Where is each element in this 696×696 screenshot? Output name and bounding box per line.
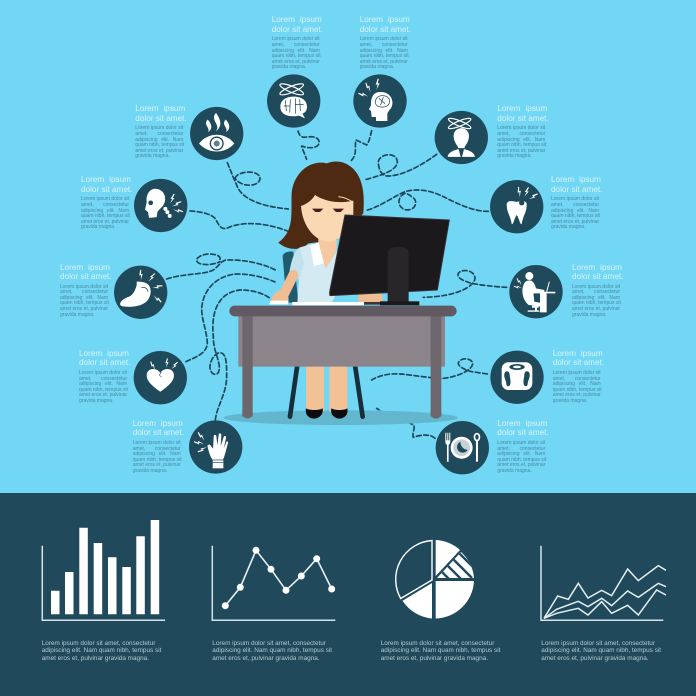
body text	[497, 125, 546, 159]
caption: multi line chart: amet eros et, pulvinar gravida magna.	[541, 655, 649, 662]
multi line chart	[541, 546, 666, 620]
icon: dizzy person	[435, 111, 488, 164]
heading	[360, 15, 411, 34]
heading: dolor sit amet.	[497, 428, 549, 437]
body text: gravida magna.	[272, 64, 306, 70]
body text: amet, consectetur	[551, 202, 599, 208]
heading: Lorem ipsum	[553, 349, 603, 358]
icon: burning eye	[190, 107, 243, 160]
icon: heart pain	[134, 351, 187, 404]
caption: pie chart: Lorem ipsum dolor sit amet, consectetur	[381, 640, 494, 646]
body text: gravida magna.	[360, 64, 394, 70]
body text: gravida magna.	[551, 224, 585, 230]
body text: amet, consectetur	[81, 202, 129, 208]
heading: Lorem ipsum	[60, 263, 110, 272]
heading	[553, 349, 604, 367]
heading: dolor sit amet.	[551, 185, 602, 194]
body text: adipiscing elit. Nam	[497, 137, 545, 143]
hair	[278, 162, 364, 249]
caption: bar chart: Lorem ipsum dolor sit amet, consectetur	[42, 640, 155, 646]
body text: gravida magna.	[60, 312, 94, 318]
body text: amet eros et, pulvinar	[133, 462, 181, 468]
body text: adipiscing elit. Nam	[79, 381, 127, 387]
body text: amet eros et, pulvinar	[79, 392, 127, 398]
body text: amet, consectetur	[497, 446, 545, 452]
pie chart	[396, 540, 480, 618]
body text	[553, 370, 602, 404]
body text: adipiscing elit. Nam	[81, 208, 129, 214]
text block: tooth	[551, 175, 602, 230]
body text: Lorem ipsum dolor sit	[135, 125, 183, 131]
heading: dolor sit amet.	[553, 358, 604, 367]
heading	[60, 263, 111, 281]
body text: gravida magna.	[79, 398, 113, 404]
face	[301, 195, 353, 242]
text block: brain	[272, 15, 323, 70]
body text: amet, consectetur	[133, 446, 181, 452]
body text: gravida magna.	[81, 224, 115, 230]
caption: pie chart: adipiscing elit. Nam quam nibh, tempus sit	[381, 647, 500, 654]
caption: line chart: adipiscing elit. Nam quam nibh, tempus sit	[212, 647, 332, 654]
body text: Lorem ipsum dolor sit	[551, 196, 599, 202]
body text: gravida magna.	[553, 398, 587, 404]
body text: amet eros et, pulvinar	[497, 148, 545, 154]
text block: scale	[553, 349, 604, 404]
icon: skull and neck pain	[134, 179, 187, 232]
desk	[229, 306, 457, 419]
heading: Lorem ipsum	[81, 175, 131, 184]
body text: quam nibh, tempus sit	[81, 213, 130, 219]
heading	[572, 263, 623, 281]
body text: quam nibh, tempus sit	[360, 53, 409, 59]
legs and shoes	[306, 365, 348, 419]
heading: dolor sit amet.	[135, 114, 187, 123]
caption: multi line chart: adipiscing elit. Nam quam nibh, tempus sit	[541, 647, 661, 654]
body text: quam nibh, tempus sit	[272, 53, 321, 59]
caption: pie chart: amet eros et, pulvinar gravida magna.	[381, 655, 488, 662]
caption: bar chart	[42, 640, 162, 662]
floor shadow	[223, 410, 458, 425]
heading: dolor sit amet.	[79, 358, 130, 367]
heading: Lorem ipsum	[497, 419, 547, 428]
text block: back	[572, 263, 623, 318]
heading: dolor sit amet.	[133, 428, 184, 437]
body text	[79, 370, 128, 404]
body text: adipiscing elit. Nam	[553, 381, 601, 387]
chair	[283, 252, 363, 417]
body text: Lorem ipsum dolor sit	[79, 370, 127, 376]
body text: quam nibh, tempus sit	[497, 142, 546, 148]
heading	[79, 349, 130, 367]
icon: stomach pain	[114, 266, 167, 319]
body text: adipiscing elit. Nam	[133, 451, 181, 457]
heading: dolor sit amet.	[497, 114, 549, 123]
body text: amet, consectetur	[79, 376, 127, 382]
body text: quam nibh, tempus sit	[497, 457, 546, 463]
body text: Lorem ipsum dolor sit	[497, 440, 545, 446]
heading: Lorem ipsum	[551, 175, 601, 184]
heading	[81, 175, 132, 194]
body text	[360, 36, 409, 70]
body text: amet, consectetur	[497, 131, 545, 137]
heading: Lorem ipsum	[360, 15, 410, 24]
body text: gravida magna.	[572, 312, 606, 318]
heading: dolor sit amet.	[60, 272, 111, 281]
body text: amet, consectetur	[272, 42, 320, 48]
caption: bar chart: amet eros et, pulvinar gravida magna.	[42, 655, 149, 662]
caption: bar chart: adipiscing elit. Nam quam nibh, tempus sit	[42, 647, 161, 654]
heading	[272, 15, 323, 34]
body text: adipiscing elit. Nam	[551, 208, 599, 214]
body text: amet, consectetur	[572, 289, 620, 295]
heading: dolor sit amet.	[81, 185, 132, 194]
body text: amet eros et, pulvinar	[497, 462, 545, 468]
text block: stomach	[60, 263, 111, 318]
heading	[497, 419, 549, 437]
heading: dolor sit amet.	[360, 25, 411, 34]
body text: quam nibh, tempus sit	[60, 300, 109, 306]
body text: Lorem ipsum dolor sit	[360, 36, 408, 42]
body text: Lorem ipsum dolor sit	[81, 196, 129, 202]
body text: Lorem ipsum dolor sit	[272, 36, 320, 42]
bottom panel background	[0, 493, 696, 696]
heading	[135, 104, 187, 123]
body text: quam nibh, tempus sit	[551, 213, 600, 219]
heading: Lorem ipsum	[572, 263, 622, 272]
text block: heart	[79, 349, 130, 404]
heading: Lorem ipsum	[79, 349, 129, 358]
keyboard and mouse	[269, 301, 381, 305]
heading	[133, 419, 184, 437]
body text: amet eros et, pulvinar	[272, 59, 320, 65]
heading: Lorem ipsum	[133, 419, 183, 428]
body text: gravida magna.	[497, 153, 532, 159]
body text	[551, 196, 600, 230]
icon: painful hand	[189, 420, 242, 474]
caption: pie chart	[381, 640, 500, 662]
body text: amet, consectetur	[135, 131, 183, 137]
body text	[81, 196, 130, 230]
body text	[572, 284, 621, 318]
body text: quam nibh, tempus sit	[135, 142, 184, 148]
body text: adipiscing elit. Nam	[60, 295, 108, 301]
line chart	[212, 546, 335, 620]
icon: bathroom scale	[490, 351, 544, 404]
dashed connectors	[167, 131, 507, 438]
heading: Lorem ipsum	[135, 104, 185, 113]
body text: amet eros et, pulvinar	[551, 219, 599, 225]
caption: line chart: Lorem ipsum dolor sit amet, consectetur	[212, 640, 326, 646]
icon: head with lightning	[353, 74, 407, 128]
text block: eye	[135, 104, 187, 159]
body text: gravida magna.	[497, 468, 532, 474]
body text	[135, 125, 184, 159]
body text: amet eros et, pulvinar	[360, 59, 408, 65]
caption: multi line chart: Lorem ipsum dolor sit amet, consectetur	[541, 640, 655, 646]
body text: adipiscing elit. Nam	[497, 451, 545, 457]
body text: gravida magna.	[135, 153, 170, 159]
caption: line chart	[212, 640, 332, 662]
body text: Lorem ipsum dolor sit	[497, 125, 545, 131]
text block: skull	[81, 175, 132, 230]
body text: amet eros et, pulvinar	[81, 219, 129, 225]
text block: head	[360, 15, 411, 70]
woman at desk illustration	[223, 162, 458, 425]
text block: plate	[497, 419, 549, 474]
heading: dolor sit amet.	[572, 272, 623, 281]
body text: quam nibh, tempus sit	[79, 387, 128, 393]
body text: amet eros et, pulvinar	[135, 148, 183, 154]
body text: Lorem ipsum dolor sit	[60, 284, 108, 290]
icon: seated back pain	[509, 265, 563, 318]
heading: Lorem ipsum	[497, 104, 547, 113]
icon: plate and cutlery	[436, 421, 489, 474]
body text: Lorem ipsum dolor sit	[553, 370, 601, 376]
body text: amet eros et, pulvinar	[60, 306, 108, 312]
text block: hand	[133, 419, 184, 474]
caption: multi line chart	[541, 640, 661, 662]
monitor	[330, 215, 449, 305]
body text: quam nibh, tempus sit	[133, 457, 182, 463]
body text	[60, 284, 109, 318]
body text: adipiscing elit. Nam	[572, 295, 620, 301]
heading: dolor sit amet.	[272, 25, 323, 34]
body text: quam nibh, tempus sit	[572, 300, 621, 306]
caption: line chart: amet eros et, pulvinar gravida magna.	[212, 655, 320, 662]
text block: dizzy	[497, 104, 549, 159]
body text: amet, consectetur	[360, 42, 408, 48]
body text	[133, 440, 182, 474]
icon: spinning brain	[267, 74, 320, 128]
body text	[497, 440, 546, 474]
body text: adipiscing elit. Nam	[135, 137, 183, 143]
icon: aching tooth	[490, 180, 543, 233]
body text: Lorem ipsum dolor sit	[572, 284, 620, 290]
body text: adipiscing elit. Nam	[360, 48, 408, 54]
bar chart	[42, 520, 165, 620]
heading	[551, 175, 602, 194]
body text	[272, 36, 321, 70]
heading	[497, 104, 549, 123]
body text: gravida magna.	[133, 468, 167, 474]
body text: amet eros et, pulvinar	[572, 306, 620, 312]
heading: Lorem ipsum	[272, 15, 322, 24]
body text: amet, consectetur	[553, 376, 601, 382]
body text: amet eros et, pulvinar	[553, 392, 601, 398]
torso	[272, 238, 382, 303]
body text: amet, consectetur	[60, 289, 108, 295]
body text: adipiscing elit. Nam	[272, 48, 320, 54]
body text: quam nibh, tempus sit	[553, 387, 602, 393]
body text: Lorem ipsum dolor sit	[133, 440, 181, 446]
